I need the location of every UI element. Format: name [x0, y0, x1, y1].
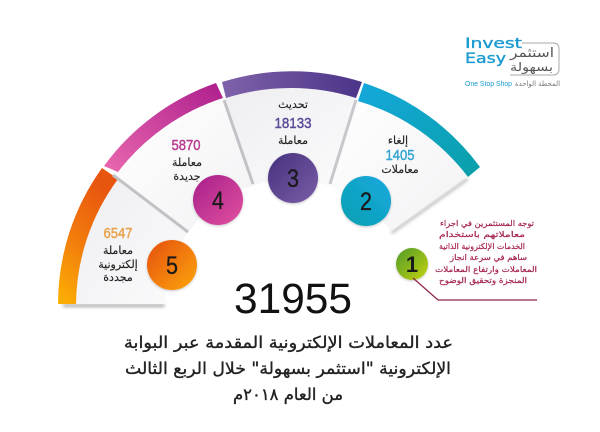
logo: Invest Easy: Invest [465, 36, 523, 52]
logo: Invest Easy: One Stop Shop [465, 79, 512, 88]
text: segment 4: 5870 [172, 137, 200, 154]
text: segment 4: معاملة [172, 156, 202, 169]
heading text [124, 333, 453, 404]
text: segment 3 [274, 98, 312, 147]
circle 3: 3 [287, 165, 299, 193]
text: segment 5: 6547 [104, 225, 132, 242]
circle 2: 2 [360, 188, 372, 216]
heading text: عدد المعاملات الإلكترونية المقدمة عبر البوابة [124, 333, 453, 353]
text: segment 3: معاملة [278, 134, 308, 147]
logo: Invest Easy [465, 36, 560, 88]
callout text: المعاملات وارتفاع المعاملات [435, 265, 537, 274]
callout text: ساهم في سرعة انجاز [449, 253, 527, 262]
circle 5: 5 [166, 252, 178, 280]
panel: segment 4 [104, 83, 252, 232]
logo: Invest Easy: بسهولة [510, 60, 553, 75]
circle 4 [193, 175, 243, 225]
text: segment 4 [172, 137, 202, 183]
text: segment 5: إلكترونية [98, 258, 138, 271]
callout text: الخدمات الإلكترونية الذاتية [439, 242, 525, 252]
callout text [435, 219, 537, 285]
callout text: توجه المستثمرين في اجراء [440, 219, 534, 228]
logo: Invest Easy: استثمر [509, 46, 554, 61]
text: segment 2 [381, 134, 419, 176]
callout text: معاملاتهم باستخدام [439, 230, 525, 239]
callout leader line [413, 278, 537, 300]
text: segment 5: معاملة [103, 244, 133, 257]
text: segment 5: مجددة [103, 271, 133, 284]
panel: segment 5 [58, 168, 189, 307]
panel: segment 2 [330, 83, 480, 234]
text: segment 3: 18133 [274, 115, 312, 132]
text: segment 5 [98, 225, 138, 284]
logo: Invest Easy: المحطة الواحدة [515, 80, 560, 88]
circle 1: 1 [406, 252, 418, 277]
callout text: المنجزة وتحقيق الوضوح [439, 276, 527, 285]
text: segment 2: إلغاء [388, 134, 408, 147]
heading text: من العام ٢٠١٨م [233, 385, 343, 404]
text: segment 2: 1405 [386, 147, 414, 164]
panel: segment 3 [222, 71, 362, 186]
text: segment 2: معاملات [381, 163, 419, 176]
logo: Invest Easy: Easy [465, 51, 506, 67]
heading text: الإلكترونية "استثمر بسهولة" خلال الربع الثالث [125, 359, 451, 379]
circle 4: 4 [212, 187, 224, 215]
circle 3 [268, 153, 318, 203]
text: segment 4: جديدة [173, 170, 201, 183]
circle 2 [341, 176, 391, 226]
circle 1 [396, 248, 428, 280]
text: segment 3: تحديث [278, 98, 308, 111]
total number: 31955 [234, 275, 352, 323]
circle 5 [147, 240, 197, 290]
